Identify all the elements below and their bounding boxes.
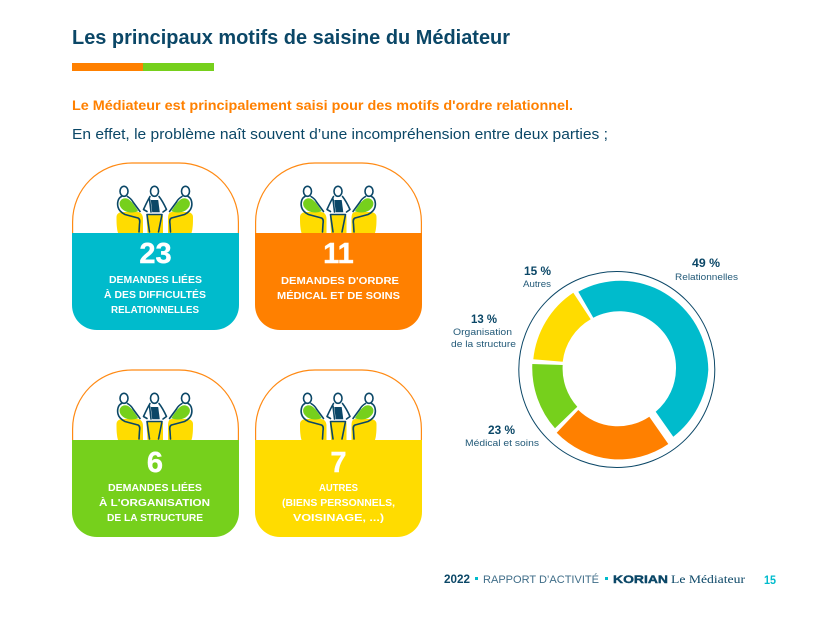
label: DEMANDES LIÉES: [108, 481, 202, 494]
footer: Le Médiateur: [671, 572, 745, 586]
icon: three seated people: [300, 393, 376, 440]
label: (BIENS PERSONNELS,: [282, 497, 395, 509]
label: DE LA STRUCTURE: [107, 512, 203, 524]
label: autres: [523, 264, 551, 290]
label: AUTRES: [319, 482, 358, 494]
label: [99, 481, 210, 524]
donut chart: [519, 272, 715, 468]
label: organisation de la structure: de la structure: [451, 339, 516, 350]
label: relationnelles: 49 %: [692, 256, 720, 270]
footer: KORIAN: [613, 574, 668, 586]
footer: [444, 572, 776, 587]
icon: three seated people: [116, 393, 193, 440]
footer: 15: [764, 573, 776, 587]
label: DEMANDES D'ORDRE: [281, 275, 399, 287]
title underline bar: [72, 63, 214, 71]
label: À DES DIFFICULTÉS: [104, 288, 206, 301]
panel: relational requests: [72, 163, 239, 330]
label: [104, 273, 206, 316]
panel: organisation requests: [72, 370, 239, 537]
label: autres: 15 %: [524, 264, 551, 278]
number: 11: [323, 238, 354, 270]
panel: other requests: [255, 370, 422, 537]
label: DEMANDES LIÉES: [109, 273, 202, 286]
number: 6: [147, 447, 163, 479]
label: RELATIONNELLES: [111, 304, 199, 316]
label: autres: Autres: [523, 279, 551, 290]
title: Les principaux motifs de saisine du Médiateur: [72, 27, 510, 49]
label: MÉDICAL ET DE SOINS: [277, 289, 400, 302]
number: 7: [330, 447, 347, 479]
label: relationnelles: [675, 256, 738, 283]
footer: 2022: [444, 574, 470, 586]
label: médical et soins: [465, 423, 539, 449]
intro sentence: En effet, le problème naît souvent d’une incompréhension entre deux parties ;: [72, 127, 608, 143]
icon: three seated people: [300, 186, 376, 233]
label: VOISINAGE, ...): [293, 512, 384, 524]
label: [277, 275, 400, 302]
panel: medical requests: [255, 163, 422, 330]
label: relationnelles: Relationnelles: [675, 272, 738, 283]
orange subtitle: Le Médiateur est principalement saisi pour des motifs d'ordre relationnel.: [72, 97, 573, 113]
label: médical et soins: 23 %: [488, 423, 515, 437]
label: médical et soins: Médical et soins: [465, 438, 539, 449]
label: À L'ORGANISATION: [99, 496, 210, 509]
label: organisation de la structure: 13 %: [471, 312, 497, 326]
label: organisation de la structure: Organisation: [453, 327, 512, 338]
label: organisation de la structure: [451, 312, 516, 350]
footer: RAPPORT D’ACTIVITÉ: [483, 573, 599, 586]
label: [282, 482, 395, 524]
number: 23: [139, 238, 172, 270]
icon: three seated people: [116, 186, 193, 233]
